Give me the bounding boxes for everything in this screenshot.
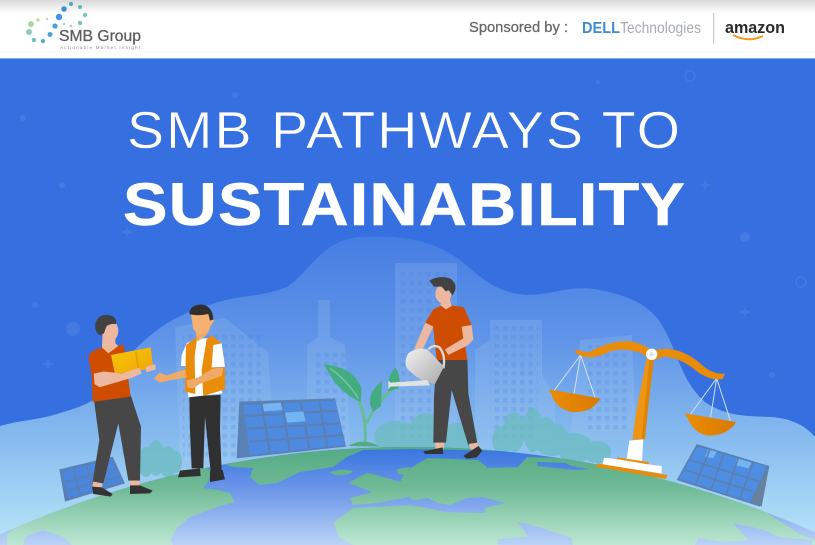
right pan (685, 413, 736, 435)
box (111, 347, 153, 374)
base post (627, 439, 643, 462)
inland sea (405, 497, 505, 513)
ankles (435, 443, 479, 450)
globe continents (7, 438, 815, 545)
hair (429, 277, 456, 295)
person in orange vest (154, 305, 225, 482)
light blue hill background (0, 236, 815, 545)
shoes (423, 446, 482, 459)
title: SUSTAINABILITY (123, 171, 686, 238)
base collar (617, 457, 649, 465)
person giving a box (88, 315, 155, 497)
northern bay (537, 462, 590, 470)
SMB Group logo (26, 2, 141, 50)
hair (189, 305, 213, 321)
beam (575, 341, 725, 379)
arm (94, 365, 155, 387)
person watering plant (388, 277, 482, 459)
neck (102, 332, 118, 353)
face (435, 285, 451, 303)
background decorations (20, 71, 806, 378)
base foot (595, 463, 667, 479)
balance scale (549, 341, 736, 479)
ankles (92, 481, 139, 487)
solar panel: far left (59, 457, 125, 502)
faint city buildings (175, 263, 636, 470)
west continent (7, 462, 235, 545)
trousers (433, 359, 477, 445)
teal bushes (138, 408, 611, 478)
small island north (397, 467, 410, 475)
shoes (178, 468, 225, 482)
Dell Technologies logo: DELL (582, 20, 620, 37)
neck (441, 297, 452, 309)
globe ocean (0, 447, 815, 545)
SMB Group logo: SMB Group (59, 28, 141, 45)
arms (414, 323, 473, 355)
header top shadow (0, 0, 815, 13)
pivot center (649, 352, 654, 357)
white shirt (181, 338, 225, 397)
north continent (225, 447, 498, 485)
torso (425, 305, 472, 360)
neck (195, 328, 210, 342)
column (633, 358, 654, 439)
SMB Group logo: Actionable Market Insight (60, 45, 141, 50)
Dell Technologies logo: Technologies (620, 20, 701, 37)
small island (330, 470, 353, 475)
hair (95, 315, 116, 335)
trousers (189, 395, 222, 472)
solar panel: center left (237, 398, 346, 458)
legs (93, 395, 141, 483)
face (191, 313, 214, 335)
pan strings (554, 355, 731, 422)
sponsored by label: Sponsored by : (469, 20, 568, 36)
pivot (646, 349, 657, 360)
solar panel: right (677, 444, 769, 507)
arms (154, 367, 223, 389)
Amazon logo: amazon (725, 18, 785, 37)
title: SMB PATHWAYS TO (127, 102, 682, 160)
watering can (428, 346, 444, 368)
torso (88, 345, 131, 402)
shoes (92, 485, 153, 497)
base plate (603, 458, 662, 473)
vest (185, 335, 225, 396)
title (123, 102, 686, 238)
top highlight line (0, 58, 815, 59)
Dell Technologies logo (582, 20, 701, 37)
header bar (0, 0, 815, 58)
plant sprout (324, 364, 399, 447)
south-east sea (498, 522, 573, 545)
sponsor divider (713, 13, 714, 44)
left pan (549, 389, 600, 412)
far south-east sea (695, 523, 812, 545)
main continent (333, 450, 815, 545)
face (102, 320, 118, 341)
column highlight (633, 358, 649, 439)
